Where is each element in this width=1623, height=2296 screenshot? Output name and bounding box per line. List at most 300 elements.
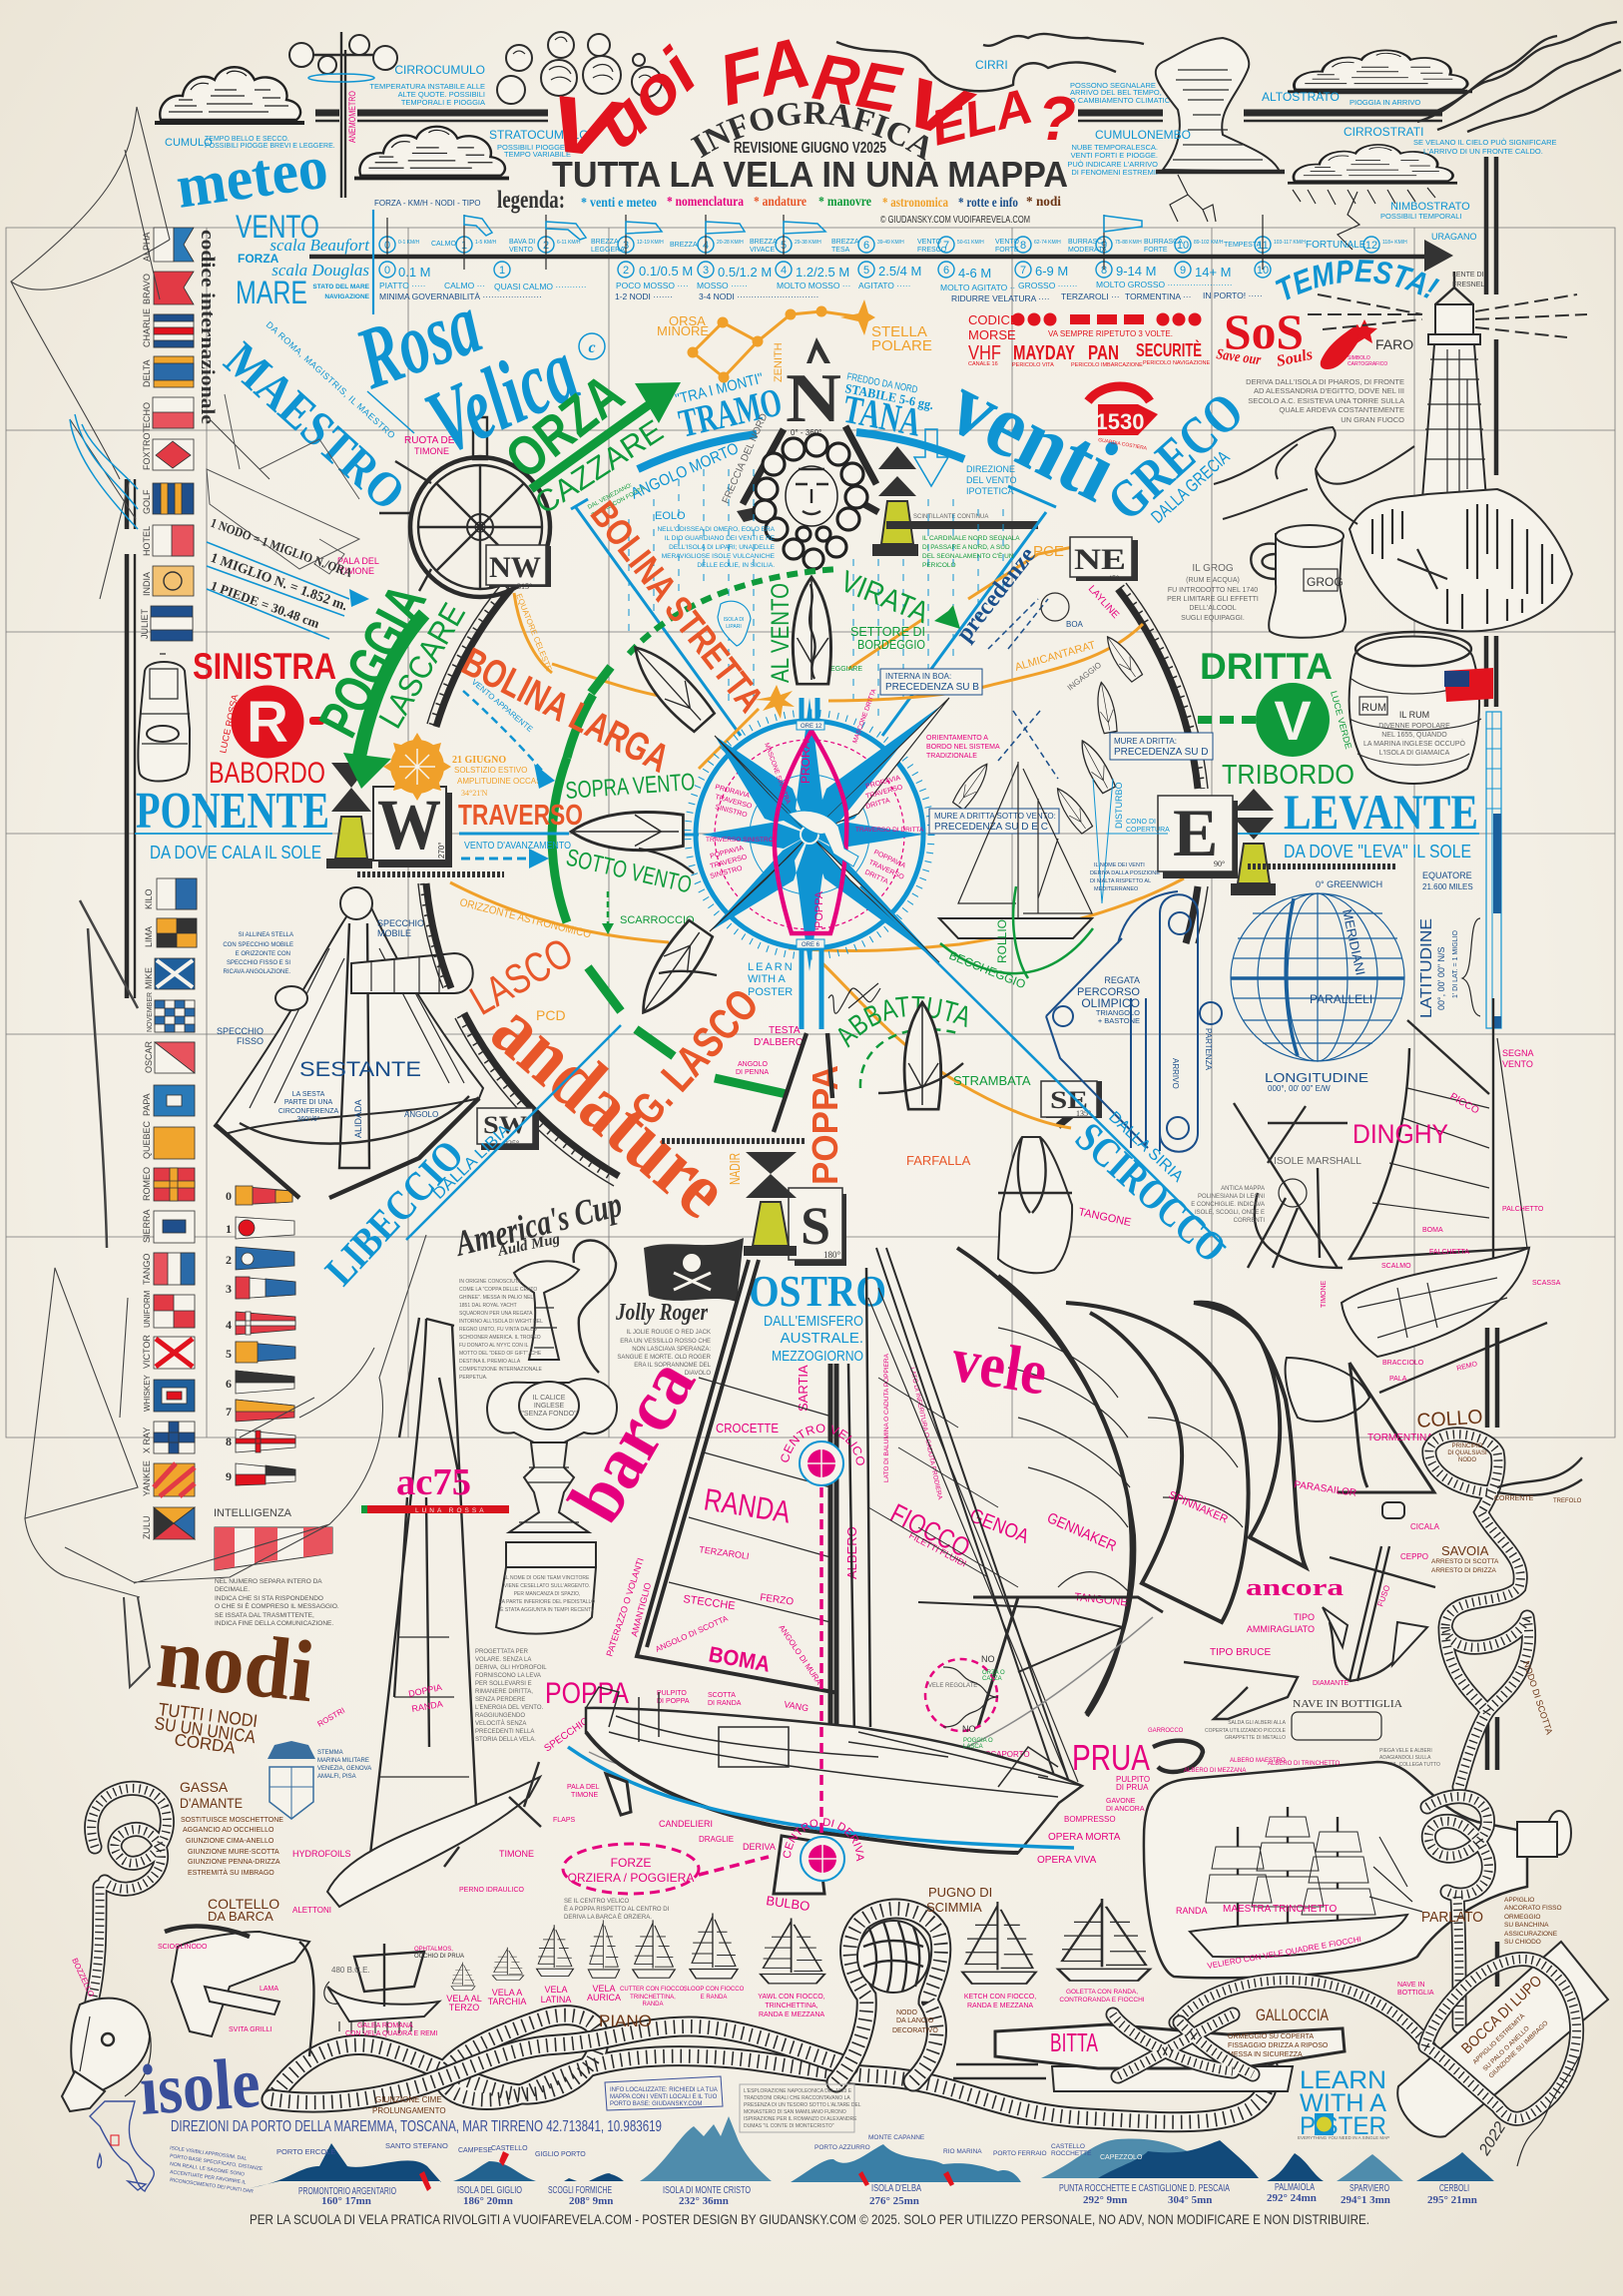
sail labels: FILETTI FLUIDI bbox=[907, 1530, 968, 1569]
coltello da barca bbox=[158, 1896, 331, 2056]
isole heading: DIREZIONI DA PORTO DELLA MAREMMA, TOSCANA, MAR TIRRENO 42.713841, 10.983619 bbox=[171, 2118, 662, 2135]
coat of arms: ROSTRI bbox=[315, 1706, 346, 1729]
island labels: SCOGLI FORMICHE bbox=[548, 2185, 612, 2196]
sail labels: TIMONE bbox=[571, 1792, 599, 1799]
wind and sea scale: 7 bbox=[1020, 265, 1026, 277]
sos: Save our bbox=[1215, 346, 1262, 368]
morse code: MAYDAY bbox=[1013, 342, 1075, 364]
sail labels: SPINNAKER bbox=[1167, 1489, 1230, 1526]
morse code: CANALE 16 bbox=[968, 361, 998, 367]
america's cup trophy: PER MANCANZA DI SPAZIO, bbox=[514, 1591, 580, 1597]
wind and sea scale: 6 bbox=[943, 265, 949, 277]
north letter and arrow bbox=[721, 337, 878, 522]
wind and sea scale: 0 bbox=[384, 265, 390, 277]
island labels: SPARVIERO bbox=[1350, 2183, 1389, 2194]
sail labels: WINCH bbox=[779, 1722, 803, 1729]
island labels: SANTO STEFANO bbox=[385, 2141, 448, 2150]
sail labels: DI POPPA bbox=[657, 1698, 690, 1705]
bitta cleat: ORMEGGIO SU COPERTA bbox=[1228, 2033, 1314, 2040]
wind and sea scale: 2 bbox=[543, 240, 549, 252]
wind and sea scale: VENTO bbox=[236, 209, 319, 245]
title: ELA bbox=[925, 78, 1038, 157]
rum barrel: IL RUM bbox=[1399, 710, 1429, 720]
guardia costiera bbox=[1088, 386, 1158, 452]
globe: MERIDIANI bbox=[1340, 908, 1368, 976]
cloud: cirri: O CAMBIAMENTO CLIMATICO. bbox=[1070, 96, 1178, 105]
wind and sea scale: 39-49 KM/H bbox=[877, 240, 904, 246]
wind: libeccio: DALLA LIBIA bbox=[430, 1121, 514, 1203]
cloud: cumulonembo: PUÒ INDICARE L'ARRIVO bbox=[1067, 160, 1158, 169]
ancora: DIAMANTE bbox=[1313, 1680, 1350, 1687]
sextant: SPECCHIO FISSO E SI bbox=[227, 960, 290, 966]
ac75: DERIVA, GLI HYDROFOIL bbox=[475, 1665, 547, 1671]
point of sail labels: D'ALBERO bbox=[754, 1037, 804, 1048]
learn with a poster logo bbox=[1298, 2066, 1389, 2140]
wind and sea scale: 1-5 KM/H bbox=[475, 240, 497, 246]
cloud: cumulonembo bbox=[1067, 38, 1285, 222]
gassa d'amante bbox=[180, 1779, 283, 1877]
cloud: cirrocumulo: ALTE QUOTE. POSSIBILI bbox=[398, 90, 485, 99]
wind and sea scale: MOSSO ······ bbox=[697, 281, 748, 290]
sail labels: POPPA bbox=[545, 1677, 629, 1710]
cloud: cirrocumulo bbox=[369, 32, 662, 107]
sos: Souls bbox=[1275, 346, 1315, 370]
precedenze panel: DERIVA DALLA POSIZIONE bbox=[1090, 870, 1160, 876]
intelligenza flag: NEL NUMERO SEPARA INTERO DA bbox=[215, 1578, 322, 1585]
cloud: cirrocumulo: TEMPORALI E PIOGGIA bbox=[401, 98, 485, 107]
globe bbox=[1231, 879, 1404, 1093]
flag labels A-Z: OSCAR bbox=[144, 1040, 154, 1073]
morse code: PERICOLO NAVIGAZIONE bbox=[1143, 360, 1210, 366]
flag labels A-Z: TANGO bbox=[142, 1254, 152, 1285]
flag labels A-Z bbox=[140, 232, 154, 1539]
cloud: cirrostrati: SE VELANO IL CIELO PUÒ SIGNIFICARE bbox=[1413, 138, 1557, 147]
dashed scale bar east bbox=[1248, 863, 1397, 869]
morse code: PAN bbox=[1088, 342, 1119, 364]
nodi heading: CORDA bbox=[173, 1730, 238, 1758]
compass rose: PRORA bbox=[799, 741, 812, 784]
morse code bbox=[968, 312, 1210, 368]
precedenze panel: TRADIZIONALE bbox=[926, 753, 977, 760]
sail labels: ANGOLO DI SCOTTA bbox=[654, 1613, 730, 1654]
footer: PER LA SCUOLA DI VELA PRATICA RIVOLGITI A VUOIFAREVELA.COM - POSTER DESIGN BY GIUDANSKY.COM © 2025. SOLO PER UTILIZZO PERSONALE, NO ADV, NON MODIFICARE E NON DISTRIBUIRE. bbox=[250, 2211, 1369, 2227]
rig types row: VELA AL bbox=[446, 1994, 482, 2004]
wind and sea scale: 89-102 KM/H bbox=[1194, 240, 1224, 246]
cloud: cumulonembo: VENTI FORTI E PIOGGE. bbox=[1071, 151, 1158, 160]
wind and sea scale: BREZZA bbox=[831, 239, 859, 246]
flag labels A-Z: SIERRA bbox=[142, 1209, 152, 1243]
wind and sea scale: 75-88 KM/H bbox=[1115, 240, 1142, 246]
cloud: cumulo: TEMPO BELLO E SECCO. bbox=[205, 136, 289, 143]
flag labels A-Z: INDIA bbox=[142, 572, 152, 596]
learn with a poster logo: P STER bbox=[1300, 2112, 1386, 2140]
wind and sea scale: TESA bbox=[831, 247, 850, 254]
venti and greco headings: DALLA GRECIA bbox=[1147, 447, 1234, 527]
sun: solstizio bbox=[383, 733, 547, 801]
olympic course: PARTENZA bbox=[1204, 1028, 1213, 1071]
dinghy: TIMONE bbox=[1321, 1280, 1328, 1308]
precedenze panel: DI MALTA RISPETTO AL bbox=[1090, 878, 1151, 884]
rum barrel: DIVENNE POPOLARE bbox=[1378, 723, 1450, 730]
flag labels A-Z: DELTA bbox=[142, 359, 152, 387]
dinghy bbox=[1321, 998, 1561, 1393]
sail labels: PARABORDO bbox=[853, 1815, 904, 1824]
galea romana: OPHTALMOS, bbox=[414, 1947, 453, 1953]
info box bbox=[605, 2076, 723, 2110]
knot labels right: NODO DI SCOTTA bbox=[1521, 1660, 1554, 1736]
orza poggia manoeuvres: LASCARE bbox=[371, 596, 472, 735]
wind and sea scale: CALMO ··· bbox=[444, 281, 485, 290]
island labels: CASTELLO bbox=[491, 2145, 528, 2152]
tramontana heading: FREDDO DA NORD bbox=[845, 371, 918, 396]
morse code: MORSE bbox=[968, 327, 1016, 342]
america's cup trophy: 1851 DAL ROYAL YACHT bbox=[459, 1303, 517, 1309]
sextant: SPECCHIO bbox=[377, 918, 424, 928]
sail labels: SCOTTA bbox=[708, 1692, 736, 1699]
sail labels: SARTIA bbox=[796, 1365, 811, 1412]
north letter and arrow: FRECCIA DEL NORD bbox=[721, 412, 770, 505]
isole heading bbox=[138, 2042, 662, 2135]
wind and sea scale: FRESCO bbox=[917, 247, 947, 254]
direction boxes bbox=[477, 537, 1238, 1266]
america's cup trophy: PERPETUA. bbox=[459, 1375, 487, 1381]
america's cup trophy: GHINEE". MESSA IN PALIO NEL bbox=[459, 1295, 533, 1301]
point of sail labels: TRAVERSO bbox=[458, 800, 583, 832]
units: nodo miglio piede bbox=[207, 515, 369, 639]
wheel bbox=[337, 417, 550, 597]
monte cristo box: MONASTERO DI SAN MAMILIANO FURONO bbox=[744, 2109, 846, 2115]
jolly roger flag bbox=[615, 1238, 744, 1377]
wind: scirocco: DALLA SIRIA bbox=[1105, 1108, 1187, 1186]
gassa d'amante: ESTREMITÀ SU IMBRAGO bbox=[188, 1868, 274, 1877]
wind and sea scale: BAVA DI bbox=[509, 239, 535, 246]
wind and sea scale: 6-11 KM/H bbox=[557, 240, 581, 246]
sail labels: LATO DI BALUMINA O CADUTA POPPIERA bbox=[883, 1353, 890, 1482]
sail labels: TANGONE bbox=[1074, 1591, 1128, 1609]
vele regolate: LASCA bbox=[963, 1744, 983, 1750]
wind and sea scale: BREZZA bbox=[750, 239, 778, 246]
sail labels: DI ANCORA bbox=[1106, 1806, 1145, 1813]
sail labels: BOMPRESSO bbox=[1064, 1815, 1116, 1824]
latitude ruler bbox=[1418, 712, 1501, 1028]
bocca di lupo: APPIGLIO ESTREMITÀ bbox=[1470, 2010, 1527, 2065]
knot labels right bbox=[1416, 1406, 1582, 1946]
number pennants 0-9 bbox=[236, 1186, 295, 1485]
wind and sea scale: 4 bbox=[703, 240, 709, 252]
lantern bbox=[138, 654, 190, 781]
america's cup trophy: VIENE CESELLATO SULL'ARGENTO. bbox=[504, 1583, 590, 1589]
orange astronomical labels: ALMICANTARAT bbox=[1014, 639, 1097, 674]
main heading: TUTTA LA VELA IN UNA MAPPA bbox=[552, 154, 1068, 195]
sextant: ANGOLO bbox=[404, 1110, 438, 1119]
cloud: altostrato: ALTOSTRATO bbox=[1262, 90, 1340, 104]
forze ellipse bbox=[563, 1844, 699, 1921]
gassa d'amante: AGGANCIO AD OCCHIELLO bbox=[183, 1827, 274, 1834]
ancora: TIPO BRUCE bbox=[1210, 1647, 1271, 1658]
precedenze panel: MURE A DRITTA SOTTO VENTO: bbox=[934, 812, 1056, 821]
rig types row: TRINCHETTINA, bbox=[765, 2003, 818, 2009]
centro velico and centro di deriva: CENTRO VELICO bbox=[781, 1424, 864, 1465]
intelligenza flag: INDICA FINE DELLA COMUNICAZIONE. bbox=[215, 1620, 333, 1627]
cardinal note: IL CARDINALE NORD SEGNALA bbox=[922, 535, 1020, 542]
legend bbox=[497, 187, 1061, 214]
compass ring bbox=[418, 432, 1208, 1186]
direction boxes: NW bbox=[489, 551, 541, 584]
wind and sea scale: 0-1 KM/H bbox=[398, 240, 420, 246]
sail labels: PARASAILOR bbox=[1294, 1479, 1357, 1499]
mini learn logo in centre bbox=[748, 961, 795, 998]
coat of arms: STEMMA bbox=[317, 1750, 343, 1756]
wind and sea scale: MOLTO GROSSO ······················· bbox=[1096, 280, 1233, 289]
wind and sea scale: 4-6 M bbox=[958, 266, 991, 281]
compass rose: POPPAVIA bbox=[710, 845, 745, 861]
cloud: cumulo: CUMULO bbox=[165, 137, 213, 149]
sail labels: COPERTA bbox=[757, 1775, 800, 1789]
rum barrel: RUM bbox=[1361, 702, 1386, 714]
america's cup trophy bbox=[450, 1184, 626, 1634]
ac75: FORNISCONO LA LEVA bbox=[475, 1673, 541, 1679]
coltello da barca: LAMA bbox=[260, 1986, 278, 1993]
mini learn logo in centre: WITH A bbox=[748, 973, 787, 985]
bitta cleat: BITTA bbox=[1050, 2027, 1098, 2057]
orza poggia manoeuvres: TIRARE CON FORZA bbox=[591, 486, 646, 519]
wind and sea scale: 6-9 M bbox=[1035, 264, 1068, 279]
ancora bbox=[1184, 1502, 1440, 1719]
cloud: cirrostrati: L'ARRIVO DI UN FRONTE CALDO. bbox=[1423, 147, 1543, 156]
wind and sea scale: MODERATA bbox=[1068, 247, 1107, 254]
wind and sea scale: VENTO bbox=[509, 247, 534, 254]
bitta cleat: MESSA IN SICUREZZA bbox=[1228, 2051, 1303, 2058]
ghost sailboat top left bbox=[11, 107, 270, 599]
forze ellipse: È A POPPA RISPETTO AL CENTRO DI bbox=[564, 1906, 670, 1913]
isole marshall: POLINESIANA DI LEGNI bbox=[1198, 1194, 1265, 1200]
wind and sea scale: AGITATO ····· bbox=[858, 281, 910, 290]
grog mug: PER LIMITARE GLI EFFETTI bbox=[1167, 596, 1259, 603]
rock hatching bbox=[1372, 504, 1552, 629]
morse code: VA SEMPRE RIPETUTO 3 VOLTE. bbox=[1048, 329, 1173, 338]
morse code: PERICOLO IMBARCAZIONE bbox=[1071, 362, 1143, 368]
rosa velica heading: Velica bbox=[412, 318, 592, 473]
rope: galloccia bbox=[1113, 1981, 1432, 2076]
galea romana: GALEA ROMANA bbox=[357, 2022, 413, 2029]
intelligenza flag: O CHE SI È COMPRESO IL MESSAGGIO. bbox=[215, 1601, 339, 1610]
wind and sea scale: FORTE bbox=[995, 247, 1019, 254]
jolly roger flag: NON LASCIAVA SPERANZA: bbox=[632, 1347, 711, 1353]
giunzione label: PROLUNGAMENTO bbox=[372, 2106, 446, 2115]
italy map bbox=[90, 2101, 264, 2195]
sail labels: VANG bbox=[784, 1699, 810, 1713]
italy map: ISOLE VISIBILI APPROSSIM. DAL bbox=[170, 2145, 248, 2162]
learn with a poster logo: WITH A bbox=[1300, 2089, 1386, 2117]
meteo heading: meteo bbox=[172, 133, 331, 222]
sos: CARTOGRAFICO bbox=[1348, 361, 1387, 367]
wind and sea scale: URAGANO bbox=[1431, 232, 1477, 242]
rum barrel bbox=[1350, 632, 1493, 784]
wind and sea scale: 118+ KM/H bbox=[1382, 240, 1407, 246]
monte cristo box: TRADIZIONI ORALI CHE RACCONTAVANO LA bbox=[744, 2095, 850, 2101]
wind and sea scale bbox=[236, 199, 1477, 314]
orange astronomical arcs bbox=[450, 544, 1184, 1128]
wind and sea scale: 4 bbox=[781, 265, 787, 277]
pennant numbers: 6 bbox=[226, 1377, 232, 1391]
nave in bottiglia: POPPA. COLLEGA TUTTO bbox=[1379, 1762, 1440, 1768]
island labels: CASTELLO bbox=[1051, 2143, 1085, 2150]
sail labels bbox=[542, 1206, 1433, 1914]
direction boxes: S bbox=[801, 1196, 830, 1256]
point of sail labels: SCARROCCIO bbox=[620, 914, 695, 926]
flag labels A-Z: VICTOR bbox=[142, 1335, 152, 1369]
wind and sea scale: FORZA - KM/H - NODI - TIPO bbox=[374, 199, 481, 208]
pennant numbers: 4 bbox=[226, 1318, 232, 1332]
compass rose: ORE 6 bbox=[802, 942, 820, 948]
heading: sinistra and babordo: LUCE ROSSA bbox=[218, 694, 240, 754]
units: nodo miglio piede: 1 MIGLIO N. = 1.852 m. bbox=[209, 551, 349, 614]
olympic course: REGATA bbox=[1104, 975, 1140, 985]
signal flags K-Z bbox=[154, 878, 197, 1539]
nave in bottiglia: ADAGIANDOLI SULLA bbox=[1379, 1755, 1431, 1761]
w box: 270° bbox=[437, 842, 446, 859]
knot labels right: PRINCIPIO bbox=[1452, 1443, 1483, 1449]
intelligenza flag bbox=[214, 1507, 339, 1627]
virata label and arrow bbox=[602, 565, 960, 934]
info box: MAPPA CON I VENTI LOCALI E IL TUO bbox=[610, 2094, 718, 2100]
island labels: CERBOLI bbox=[1439, 2183, 1469, 2194]
america's cup trophy: DESTINA IL PREMIO ALLA bbox=[459, 1359, 521, 1365]
america's cup trophy: FU DONATO AL NYYC CON IL bbox=[459, 1343, 529, 1349]
coltello da barca: SVITA GRILLI bbox=[229, 2026, 271, 2033]
wind and sea scale: VENTO bbox=[917, 239, 942, 246]
vele regolate: ORZA O bbox=[982, 1670, 1005, 1676]
ac75: DOPPIA bbox=[407, 1682, 443, 1699]
rig types row: LATINA bbox=[541, 1995, 571, 2005]
precedenze panel: precedenze bbox=[951, 542, 1041, 647]
ac75: HYDROFOILS bbox=[292, 1849, 351, 1859]
bocca di lupo bbox=[1397, 1942, 1608, 2137]
wind and sea scale: 3 bbox=[623, 240, 629, 252]
pennant numbers: 9 bbox=[226, 1469, 232, 1483]
wind and sea scale: 0 bbox=[384, 240, 390, 252]
sail labels: AMANTIGLIO bbox=[629, 1581, 653, 1638]
venti and greco headings: GRECO bbox=[1096, 380, 1255, 532]
ostro heading: AUSTRALE. bbox=[781, 1330, 863, 1347]
cardinal mark south bbox=[744, 1152, 797, 1256]
sun: solstizio: 34°21'N bbox=[461, 789, 488, 798]
sailboat rollio beccheggio bbox=[939, 762, 1093, 991]
cardinal note bbox=[922, 535, 1020, 569]
coat of arms: VENEZIA, GENOVA bbox=[317, 1766, 371, 1772]
pennant numbers: 1 bbox=[226, 1222, 232, 1236]
gassa d'amante: SOSTITUISCE MOSCHETTONE bbox=[181, 1817, 283, 1824]
rig types row: YAWL CON FIOCCO, bbox=[758, 1994, 825, 2001]
grog mug bbox=[1167, 525, 1346, 638]
virata label and arrow: AL VENTO bbox=[767, 583, 795, 683]
tramontana heading: TRAMO bbox=[675, 379, 786, 446]
island labels: ISOLA D'ELBA bbox=[871, 2183, 921, 2194]
sail labels: GARROCCO bbox=[1148, 1728, 1184, 1734]
wind and sea scale: GROSSO ······· bbox=[1018, 281, 1078, 290]
wind and sea scale: 11 bbox=[1257, 240, 1269, 252]
ghost boats lower left bbox=[25, 900, 426, 1687]
dinghy: PALA bbox=[1389, 1376, 1407, 1383]
ship in bottle: MAESTRA bbox=[1223, 1904, 1272, 1915]
island labels: 232° 36mn bbox=[679, 2195, 729, 2207]
rig types row: RANDA bbox=[642, 2002, 664, 2008]
orza poggia manoeuvres: DAL VENEZIANO: bbox=[587, 482, 634, 511]
flag labels A-Z: ROMEO bbox=[142, 1167, 152, 1201]
heading: dritta and tribordo: V bbox=[1274, 689, 1312, 752]
wind and sea scale: QUASI CALMO ··········· bbox=[494, 282, 587, 291]
ac75: PRECEDENTI NELLA bbox=[475, 1729, 534, 1735]
intelligenza flag: INDICA CHE SI STA RISPONDENDO bbox=[215, 1595, 323, 1602]
venti and greco headings bbox=[934, 355, 1255, 532]
sextant: PARTE DI UNA bbox=[284, 1099, 333, 1106]
sail labels: BOCCAPORTO bbox=[973, 1750, 1030, 1759]
direction boxes: E bbox=[1173, 795, 1218, 870]
island labels: PALMAIOLA bbox=[1275, 2182, 1315, 2193]
wind and sea scale: 62-74 KM/H bbox=[1034, 240, 1061, 246]
dinghy: REMO bbox=[1456, 1361, 1478, 1373]
text: faro: SECOLO A.C. ESISTEVA UNA TORRE SULLA bbox=[1248, 396, 1404, 405]
wind and sea scale: 5 bbox=[863, 265, 869, 277]
morse code: SECURITÈ bbox=[1136, 339, 1202, 360]
cardinal note: PERICOLO bbox=[922, 562, 956, 569]
rig types row: VELA bbox=[544, 1985, 568, 1995]
compass rose: PRORAVIA bbox=[865, 775, 901, 791]
olympic course: OLIMPICO bbox=[1081, 996, 1140, 1010]
rig types row: VELA bbox=[592, 1984, 616, 1994]
point of sail labels: NADIR bbox=[727, 1153, 744, 1185]
ancora: TIPO bbox=[1294, 1612, 1315, 1622]
legend: * venti e meteo bbox=[581, 196, 657, 211]
morse code: CODICE bbox=[968, 312, 1019, 327]
ac75: STORIA DELLA VELA. bbox=[475, 1737, 536, 1743]
lighthouse: FRESNEL bbox=[1452, 282, 1484, 288]
jolly roger flag: SANGUE E MORTE. OLD ROGER bbox=[617, 1355, 712, 1361]
compass rose bbox=[688, 687, 949, 1132]
point of sail labels: LASCO bbox=[462, 928, 581, 1024]
forze ellipse: ORZIERA / POGGIERA bbox=[568, 1871, 694, 1885]
info box: PORTO BASE: GIUDANSKY.COM bbox=[610, 2101, 702, 2107]
north cardinal mark: SCINTILLANTE CONTINUA bbox=[913, 514, 988, 520]
rig types row: RANDA E MEZZANA bbox=[967, 2003, 1033, 2009]
eolo text: MERAVIGLIOSE ISOLE VULCANICHE bbox=[662, 553, 776, 560]
green tack and gybe arc bbox=[552, 569, 958, 1094]
garrocco bbox=[1153, 1741, 1203, 1772]
cloud: stratocumulo bbox=[354, 127, 589, 178]
direction boxes: 90° bbox=[1214, 860, 1225, 868]
bitta cleat: FISSAGGIO DRIZZA A RIPOSO bbox=[1228, 2042, 1329, 2049]
flag labels A-Z: KILO bbox=[144, 888, 154, 909]
dinghy: SCALMO bbox=[1381, 1263, 1411, 1270]
island labels: 160° 17mn bbox=[321, 2195, 371, 2207]
flag labels A-Z: GOLF bbox=[142, 489, 152, 514]
ship in bottle: TRINCHETTO bbox=[1273, 1904, 1337, 1915]
cloud: cumulonembo: CUMULONEMBO bbox=[1095, 128, 1191, 142]
ancora: FUSO bbox=[1375, 1584, 1391, 1608]
sail labels: TERZAROLI bbox=[699, 1544, 750, 1561]
isole marshall: ANTICA MAPPA bbox=[1221, 1186, 1265, 1192]
orza poggia manoeuvres bbox=[306, 361, 681, 789]
nave in bottiglia bbox=[1205, 1699, 1440, 1768]
jolly roger flag: Jolly Roger bbox=[615, 1300, 709, 1326]
sextant: CON SPECCHIO MOBILE bbox=[223, 942, 293, 948]
sail labels: vele bbox=[947, 1324, 1052, 1409]
sail labels: GENNAKER bbox=[1044, 1509, 1119, 1555]
signal flags A-J bbox=[151, 228, 194, 641]
point of sail labels: FARFALLA bbox=[906, 1153, 971, 1168]
ship in bottle: ALBERO DI MEZZANA bbox=[1184, 1768, 1246, 1774]
orza poggia manoeuvres: CAZZARE bbox=[529, 413, 669, 521]
